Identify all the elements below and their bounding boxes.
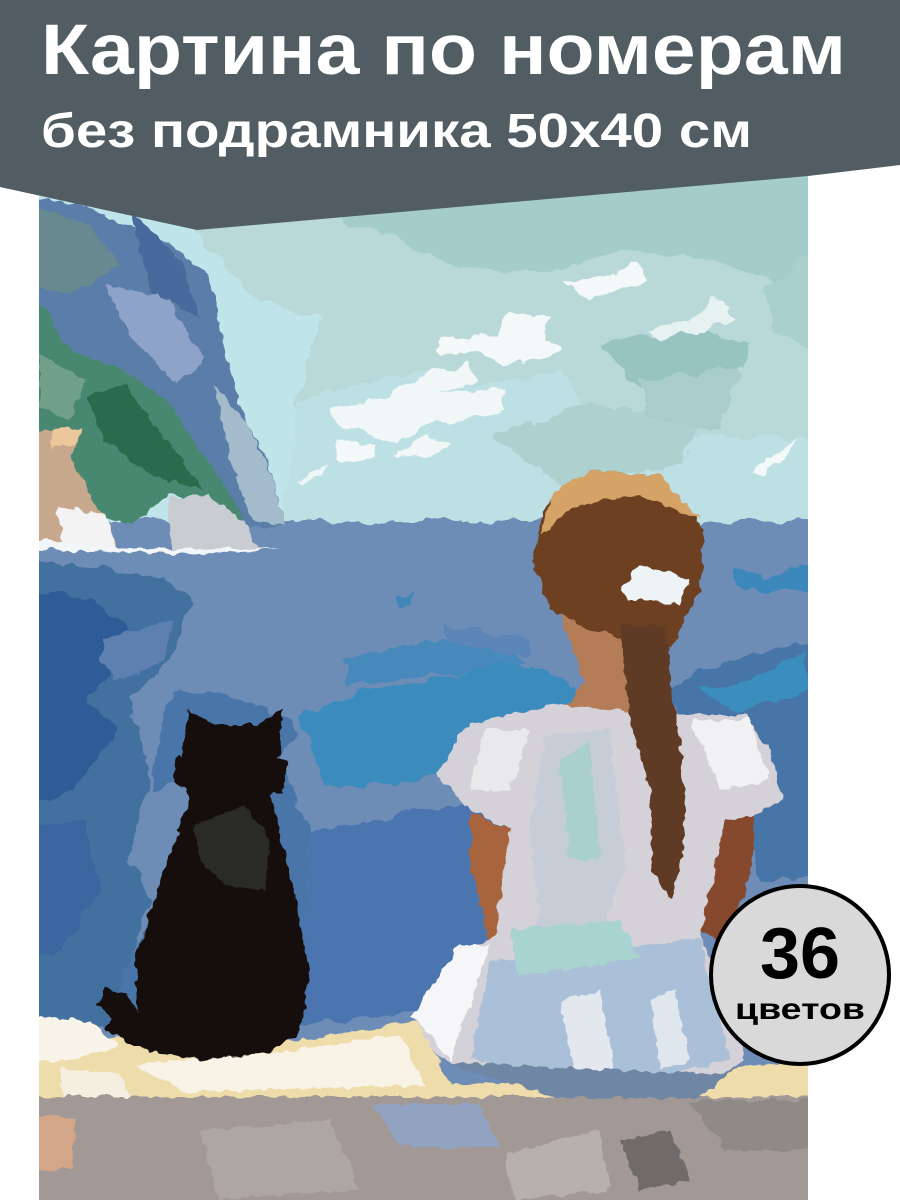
girl bbox=[412, 470, 783, 1098]
hair bbox=[532, 470, 705, 650]
cat bbox=[98, 708, 310, 1060]
sea bbox=[39, 517, 808, 1086]
arms bbox=[468, 812, 512, 940]
dress bbox=[412, 705, 783, 1095]
neck and head bbox=[550, 590, 680, 730]
sky bbox=[39, 176, 808, 526]
badge: 36 colours bbox=[711, 886, 889, 1064]
ledge bbox=[20, 1015, 830, 1200]
hair tie bbox=[620, 565, 690, 605]
painting: girl and cat by the sea bbox=[20, 160, 830, 1200]
badge: 36 colours: цветов bbox=[735, 993, 865, 1026]
cliffs bbox=[30, 196, 285, 554]
title: Картина по номерам bbox=[41, 11, 846, 90]
subtitle: без подрамника 50х40 см bbox=[41, 105, 752, 158]
header banner bbox=[0, 0, 900, 230]
badge: 36 colours: 36 bbox=[760, 914, 840, 994]
braid bbox=[620, 625, 685, 900]
